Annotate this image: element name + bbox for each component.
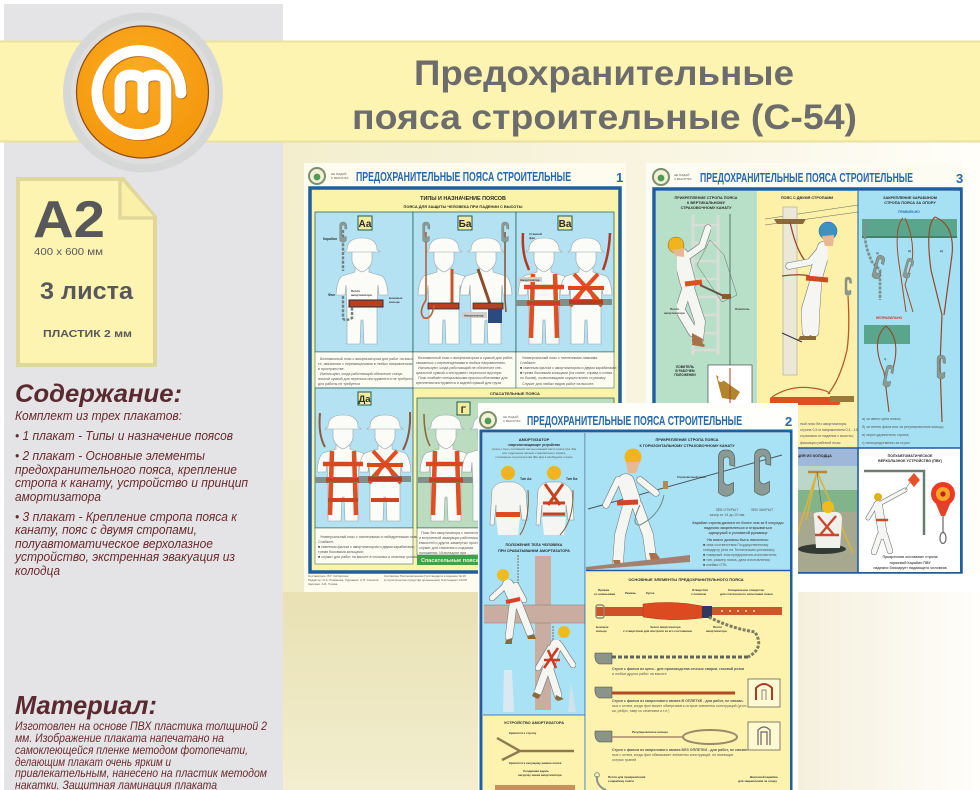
cell: fall arrester: ПОЛУАВТОМАТИЧЕСКОЕ	[888, 454, 933, 458]
safety belt	[595, 602, 782, 664]
cell Aa: в пространстве.	[318, 367, 345, 371]
poster 3 header: С ВЫСОТЫ!	[674, 177, 692, 181]
lanyard 2	[595, 679, 780, 707]
cell Va: Служит для любых видов работ на высоте.	[522, 382, 594, 386]
cell Ba: Ба	[459, 219, 472, 230]
text block: material: привлекательным, нанесено на пластик методом	[15, 768, 267, 780]
cell: carabiner fastening: ЗАКРЕПЛЕНИЕ КАРАБИНОМ	[883, 196, 937, 200]
lanyard 4	[595, 773, 778, 790]
cell Va: ■ тремя боковыми кольцами (на спине, справа и слева	[520, 371, 612, 375]
cell: fall arrester: ВЕРХОЛАЗНОЕ УСТРОЙСТВО (ПВУ)	[878, 459, 943, 463]
cell Ba: циальной сумкой и инструмент переносит вручную.	[416, 371, 502, 375]
cell: main belt elements: Кусок	[646, 591, 655, 595]
cell: horizontal rope: ПРИКРЕПЛЕНИЕ СТРОПА ПОЯСА	[655, 438, 719, 442]
cell Da: Снабжен:	[318, 540, 334, 544]
poster 3 header: НЕ ПАДАЙ	[674, 173, 689, 177]
cream area lower right	[798, 592, 980, 790]
text block: contents: Содержание:	[15, 380, 182, 408]
cell: main belt elements: с пояском	[691, 592, 707, 596]
cream background gradient	[283, 141, 980, 573]
text block: material: делающим плакат очень ярким и	[15, 757, 172, 769]
cell Va: по бокам), позволяющими осуществлять страховку	[520, 376, 606, 380]
text block: contents: • 2 плакат - Основные элементы	[15, 449, 205, 463]
cell: main belt elements: для статического испытания пояса	[720, 592, 773, 596]
poster 1 credits: в строительстве (средства применения) Госстандарт СССР	[384, 578, 467, 582]
cell: two lanyards: ПОЯС С ДВУМЯ СТРОПАМИ	[781, 196, 833, 200]
cell: main belt elements: Строп с фалом из цепи - для производства сечных сварки, газовой резки	[612, 667, 744, 671]
poster 2 header: ПРЕДОХРАНИТЕЛЬНЫЕ ПОЯСА СТРОИТЕЛЬНЫЕ	[527, 413, 742, 428]
cell: carabiner fastening: г) непосредственно за строп	[862, 441, 910, 445]
cell: carabiner fastening: НЕПРАВИЛЬНО	[876, 316, 903, 320]
poster 3 header: 3	[956, 171, 963, 186]
text block: contents: Комплект из трех плакатов:	[15, 409, 182, 423]
icon: orange logo	[63, 12, 223, 172]
cell: main belt elements: ОСНОВНЫЕ ЭЛЕМЕНТЫ ПРЕДОХРАНИТЕЛЬНОГО ПОЯСА	[628, 577, 744, 582]
cell: horizontal rope: стандарту (или на Техническим условиям);	[703, 548, 775, 552]
text block: contents	[14, 380, 248, 578]
poster 2 frame	[481, 431, 791, 790]
cell: vertical rope: амортизатора	[664, 311, 685, 315]
poster 2 header	[480, 412, 792, 429]
title: Предохранительные	[414, 54, 794, 93]
rescue belts cell: СПАСАТЕЛЬНЫЕ ПОЯСА	[490, 391, 540, 396]
panel: A2 format sheet: ПЛАСТИК 2 мм	[43, 328, 132, 340]
cell: main belt elements: ных с огнем, когда фал обвязывает элементы конструкций, не имеющие	[612, 753, 733, 757]
cell: horizontal rope: ЗЕВ ЗАКРЫТ	[751, 508, 774, 512]
cell: two lanyards	[757, 191, 863, 448]
worker walking	[606, 480, 656, 562]
text block: material: Изготовлен на основе ПВХ пластика толщиной 2	[15, 721, 268, 733]
banner: yellow title strip	[0, 42, 980, 142]
cell Da: ■ служит для работ на высоте в сложных и опасных условиях.	[318, 555, 423, 559]
cell: horizontal rope: Страховочный канат	[677, 475, 707, 479]
lanyard 4: к карабину пояса	[608, 779, 634, 783]
cell: horizontal rope: К ГОРИЗОНТАЛЬНОМУ СТРАХОВОЧНОМУ КАНАТУ	[639, 444, 735, 448]
cell Va: ■ сменным фалом с амортизатором и двумя карабинами;	[520, 366, 617, 370]
cell: main belt elements: со шпеньками	[594, 592, 615, 596]
back-view workers: Тип Ба	[566, 477, 577, 481]
cell Ba: Используют, когда работающий не обеспечен спе-	[418, 366, 503, 370]
cell: shock absorber: ПОЛОЖЕНИЕ ТЕЛА ЧЕЛОВЕКА	[506, 543, 563, 547]
cell: carabiner fastening: б)	[908, 249, 911, 253]
poster 3 frame	[654, 189, 961, 572]
cell: carabiner fastening: в) через удлинитель стропа;	[862, 433, 909, 437]
cell: main belt elements: Боковое	[596, 625, 609, 629]
cell Ba: Пояс снабжён специальными приспособлениями для	[418, 376, 507, 380]
cell: fall arrester	[757, 448, 960, 572]
cell: shock absorber: пояса с быть составной частью нижней части пояса (Аа, Ба)	[492, 447, 576, 451]
cell: main belt elements: Строп с фалом из капронового каната БЕЗ ОПЛЕТКИ - для работ, не связан-	[612, 748, 749, 752]
cell: vertical rope: Ловитель	[735, 307, 750, 311]
rescue belts cell: емкостей и других замкнутых пространств	[419, 541, 490, 545]
cell Aa: те, связанных с перемещениями в любых направлениях	[318, 362, 413, 366]
cell: shock absorber	[483, 433, 585, 715]
cell: two lanyards: ный пояс без амортизатора.	[800, 422, 847, 426]
text block: contents: канату, пояс с двумя стропами,	[15, 523, 197, 537]
panel: left sidebar	[4, 4, 283, 790]
cell Va: Ва	[559, 219, 572, 230]
poster 1 header: НЕ ПАДАЙ	[331, 172, 346, 176]
poster 2 header: НЕ ПАДАЙ	[503, 415, 518, 419]
lanyard 4: Петля для прикрепления	[608, 775, 646, 779]
cell Va: Амортизатор	[520, 278, 540, 282]
poster 1 credits: Чертежи: А.Б. Гусева	[308, 582, 338, 586]
cell Aa: Безлямочный пояс с амортизатором для работ на высо-	[320, 357, 415, 361]
cell: carabiner fastening: б) за петлю фала или за регулировочное кольцо;	[862, 425, 944, 429]
hook b rope	[897, 218, 913, 312]
hook a chain	[865, 220, 880, 300]
cell: main belt elements: Чехол амортизатора	[650, 625, 681, 629]
cell Ba	[413, 212, 516, 388]
panel: poster 3	[646, 163, 963, 573]
poster 2 header: 2	[785, 414, 792, 429]
cell: shock absorber: энергопоглощающее устройство	[508, 443, 560, 447]
rescue belts cell: служит для спасения и подъема	[419, 546, 473, 550]
cell: vertical rope	[656, 191, 757, 448]
poster 1 header: С ВЫСОТЫ!	[331, 176, 349, 180]
cell: shock absorber: ПРИ СРАБАТЫВАНИИ АМОРТИЗАТОРА	[498, 549, 570, 553]
cell: two lanyards: стропа 0,5 м напряжением 0,4 - 10 кВ	[800, 428, 863, 432]
cell: main belt elements: кольцо	[596, 629, 607, 633]
cell Da: Да	[358, 394, 371, 405]
text block: contents: • 1 плакат - Типы и назначение поясов	[15, 429, 233, 443]
cell Va: Снабжен:	[520, 361, 536, 365]
cell: main belt elements: Специальное отверстие	[728, 588, 764, 592]
title	[352, 54, 857, 137]
text block: contents: устройство, экстренная эвакуация из	[14, 550, 235, 564]
poster 1 credits: Составитель: В.Г. Сибирская	[308, 574, 349, 578]
cell Aa: Аа	[359, 219, 372, 230]
poster 1 heading: ПОЯСА ДЛЯ ЗАЩИТЫ ЧЕЛОВЕКА ПРИ ПАДЕНИИ С ВЫСОТЫ	[404, 204, 523, 209]
cell: carabiner fastening: а) за звено цепи пояса;	[862, 417, 901, 421]
cell: fall arrester: Прикрепляя основание стропа	[882, 555, 938, 559]
rescue belts cell: Спасательные пояса не как	[421, 558, 497, 564]
cell Aa: кольца	[389, 300, 400, 304]
cell: carabiner fastening: г)	[884, 357, 886, 361]
poster 1 header	[309, 168, 623, 185]
cell: well evacuation	[757, 448, 858, 572]
cell Ba: связанных с перемещениями в любых направлениях.	[416, 361, 506, 365]
text block: contents: стропа к канату, устройство и принцип	[15, 476, 248, 490]
cell: horizontal rope: надежно закрепляться и открываться	[704, 526, 772, 530]
worker on ladder	[680, 228, 708, 340]
poster 1 heading	[404, 196, 523, 209]
cell: carabiner fastening: ПРАВИЛЬНО	[898, 210, 920, 214]
cell: horizontal rope: Карабин стропа должен не более чем за 5 секунды	[692, 521, 784, 525]
cell: absorber device: Созданная вдоль	[523, 769, 549, 773]
lanyard 3	[595, 722, 780, 750]
cream strip left of poster 1	[283, 480, 304, 592]
cell Aa	[315, 212, 415, 388]
cell: absorber device: Крепится к несущему ремню пояса	[509, 761, 562, 765]
text block: material: самоклеющейся пленке методом фотопечати,	[15, 745, 248, 757]
panel: A2 format sheet: 400 х 600 мм	[34, 247, 103, 258]
cell: main belt elements	[586, 570, 790, 790]
worker falling 2	[538, 645, 573, 695]
cell: horizontal rope: На поясе должны быть нанесены:	[707, 538, 769, 542]
cell: fall arrester: надежно блокирует падающего человека	[873, 566, 948, 570]
cell: horizontal rope: ■ клеймо ОТК.	[703, 563, 727, 567]
poster 1 heading: ТИПЫ И НАЗНАЧЕНИЕ ПОЯСОВ	[420, 196, 506, 202]
worker on pole	[789, 248, 824, 332]
cell: horizontal rope	[586, 433, 790, 570]
cell: main belt elements: Пряжка	[598, 588, 609, 592]
cell Aa: Фал	[328, 293, 335, 297]
poster 1 credits: Редактор: О.А. Романова. Художник: А.П. Соколов	[308, 578, 379, 582]
panel: A2 format sheet	[18, 179, 155, 365]
rescue belts cell: положении. Используют при	[419, 551, 466, 555]
cell: main belt elements: ка, ребро, тавр со сечением и т.п.)	[612, 709, 669, 713]
cell Da: Универсальный пояс с наплечными и набедренными лямками.	[320, 535, 425, 539]
cell Da: ■ сменным фалом с амортизатором и двумя карабинами;	[318, 545, 415, 549]
rescue belts cell	[417, 391, 614, 565]
cell Aa: Петля	[351, 289, 360, 293]
text block: contents: амортизатора	[15, 490, 101, 504]
cell Va: Стяжной	[529, 232, 542, 236]
cell: vertical rope: ПОЛОЖЕНИИ	[674, 373, 696, 377]
cell Aa: Карабин	[323, 237, 337, 241]
back-view workers	[490, 466, 577, 535]
poster 1 header: 1	[616, 170, 623, 185]
text block: contents: предохранительного пояса, крепление	[15, 463, 237, 477]
cell Aa: Боковые	[389, 296, 403, 300]
rescue belts cell: и встроенной эвакуации работника из	[419, 536, 483, 540]
panel: poster 1	[304, 163, 626, 592]
poster 1 header: ПРЕДОХРАНИТЕЛЬНЫЕ ПОЯСА СТРОИТЕЛЬНЫЕ	[356, 169, 571, 184]
rescue belts cell: Пояс без амортизатора с наплечными лямками	[421, 531, 500, 535]
cell: shock absorber: с помощью строительства (Ва, Да) в свободном стропе	[495, 455, 573, 459]
cell: horizontal rope: зазор от 14 до 20 мм	[710, 513, 745, 517]
cell Va: фал	[529, 236, 535, 240]
cell Aa: альной сумкой для переноса инструмента и не требуется	[318, 377, 414, 381]
cell: carabiner fastening	[858, 191, 960, 448]
cell: carabiner fastening: а)	[876, 251, 879, 255]
text block: contents: колодца	[15, 564, 60, 578]
cell: absorber device	[483, 715, 585, 790]
cream area below poster 1	[283, 592, 483, 790]
cell: absorber device: УСТРОЙСТВО АМОРТИЗАТОРА	[504, 720, 564, 725]
title: пояса строительные (С-54)	[352, 98, 857, 137]
cell Aa: Используют, когда работающий обеспечен специ-	[320, 372, 404, 376]
cell: vertical rope: ЛОВИТЕЛЬ	[676, 365, 695, 369]
cell: vertical rope: В РАБОЧЕМ	[675, 369, 695, 373]
cell: absorber device: нагрузку звена амортизатора	[518, 773, 562, 777]
cell: shock absorber: АМОРТИЗАТОР	[519, 437, 550, 442]
poster 1 credits	[308, 574, 467, 586]
panel: A2 format sheet: 3 листа	[40, 278, 134, 305]
cell: two lanyards: фиксации рабочей позы	[800, 441, 841, 445]
cell: main belt elements: и любых других работ на высоте	[612, 672, 667, 676]
panel: poster 2	[478, 403, 798, 790]
cell: carabiner fastening: в)	[940, 249, 943, 253]
cell: vertical rope: ПРИКРЕПЛЕНИЕ СТРОПА ПОЯСА	[674, 196, 738, 200]
cell: main belt elements: Петля	[713, 625, 722, 629]
cell: horizontal rope: ■ товарный знак предприятия-изготовителя;	[703, 553, 777, 557]
cell: horizontal rope: ■ знак соответствия Государственному	[703, 543, 768, 547]
cell: main belt elements: Строп с фалом из капронового каната В ОПЛЕТКЕ - для работ, не связан-	[612, 699, 744, 703]
poster 2 header: С ВЫСОТЫ!	[503, 419, 521, 423]
text block: material: мм. Изображение плаката напечатано на	[15, 733, 224, 745]
cell: main belt elements: с отверстием для контроля за его состоянием	[623, 629, 693, 633]
cell Ba: Амортизатор	[464, 314, 484, 318]
cell: main belt elements: амортизатора	[706, 629, 727, 633]
cell Va: Универсальный пояс с наплечными лямками.	[522, 356, 598, 360]
worker falling 1	[492, 585, 530, 637]
cell: well evacuation: ЭВАКУАЦИЯ ИЗ КОЛОДЦА	[782, 454, 832, 458]
lanyard 3: Регулировочное кольцо	[632, 730, 668, 734]
panel: A2 format sheet: А2	[33, 191, 105, 249]
text block: material	[15, 690, 268, 790]
cell Ba: крепления инструмента и задней сумкой для груза	[416, 381, 501, 385]
cell: horizontal rope: однорукой и угловатой рукавице	[708, 531, 768, 535]
cell: carabiner fastening: СТРОПА ПОЯСА ЗА ОПОРУ	[884, 201, 936, 205]
cell: horizontal rope: ■ тип, размер пояса, дата изготовления;	[703, 558, 770, 562]
cell: vertical rope: Петля	[670, 307, 679, 311]
cell Aa: для работы не требуется	[318, 382, 360, 386]
cell: shock absorber: или отдельным звеном страховочного каната,	[502, 451, 566, 455]
cell: absorber device: Крепится к стропу	[509, 731, 537, 735]
hook c rope	[929, 217, 952, 422]
cell Va	[516, 212, 617, 388]
poster 1 frame	[310, 188, 620, 572]
cell: fall arrester: торжевой Карабин ПВУ	[889, 561, 931, 565]
cell: main belt elements: Ремень	[625, 591, 636, 595]
poster 1 credits: Составлен Постановлением Госстандарта в издании № 26	[384, 574, 466, 578]
text block: contents: • 3 плакат - Крепление стропа пояса к	[15, 510, 238, 524]
cell: two lanyards: страховка от падения с высоты;	[800, 434, 854, 438]
cell Ba: Безлямочный пояс с амортизатором и сумкой для работ,	[418, 356, 513, 360]
rescue belts cell: Г	[461, 405, 467, 416]
back-view workers: Тип Аа	[520, 477, 532, 481]
text block: contents: полуавтоматическое верхолазное	[15, 537, 213, 551]
cell: vertical rope: СТРАХОВОЧНОМУ КАНАТУ	[681, 206, 732, 210]
cell: main belt elements: ных с огнем, когда фал может обвертывать острые элементы конструкций (угол-	[612, 704, 748, 708]
lanyard 4: Винтовой карабин	[750, 775, 778, 779]
cell Da: тремя боковыми кольцами;	[318, 550, 364, 554]
cell: vertical rope: К ВЕРТИКАЛЬНОМУ	[687, 201, 726, 205]
text block: material: Материал:	[15, 690, 157, 720]
lanyard 4: для закрепления за опору	[738, 779, 777, 783]
cell: main belt elements: острых граней	[612, 758, 636, 762]
cell: main belt elements: Отверстия	[692, 588, 708, 592]
cell Aa: амортизатора	[351, 293, 372, 297]
cell: horizontal rope: ЗЕВ ОТКРЫТ	[716, 508, 739, 512]
cell Da	[315, 388, 425, 564]
